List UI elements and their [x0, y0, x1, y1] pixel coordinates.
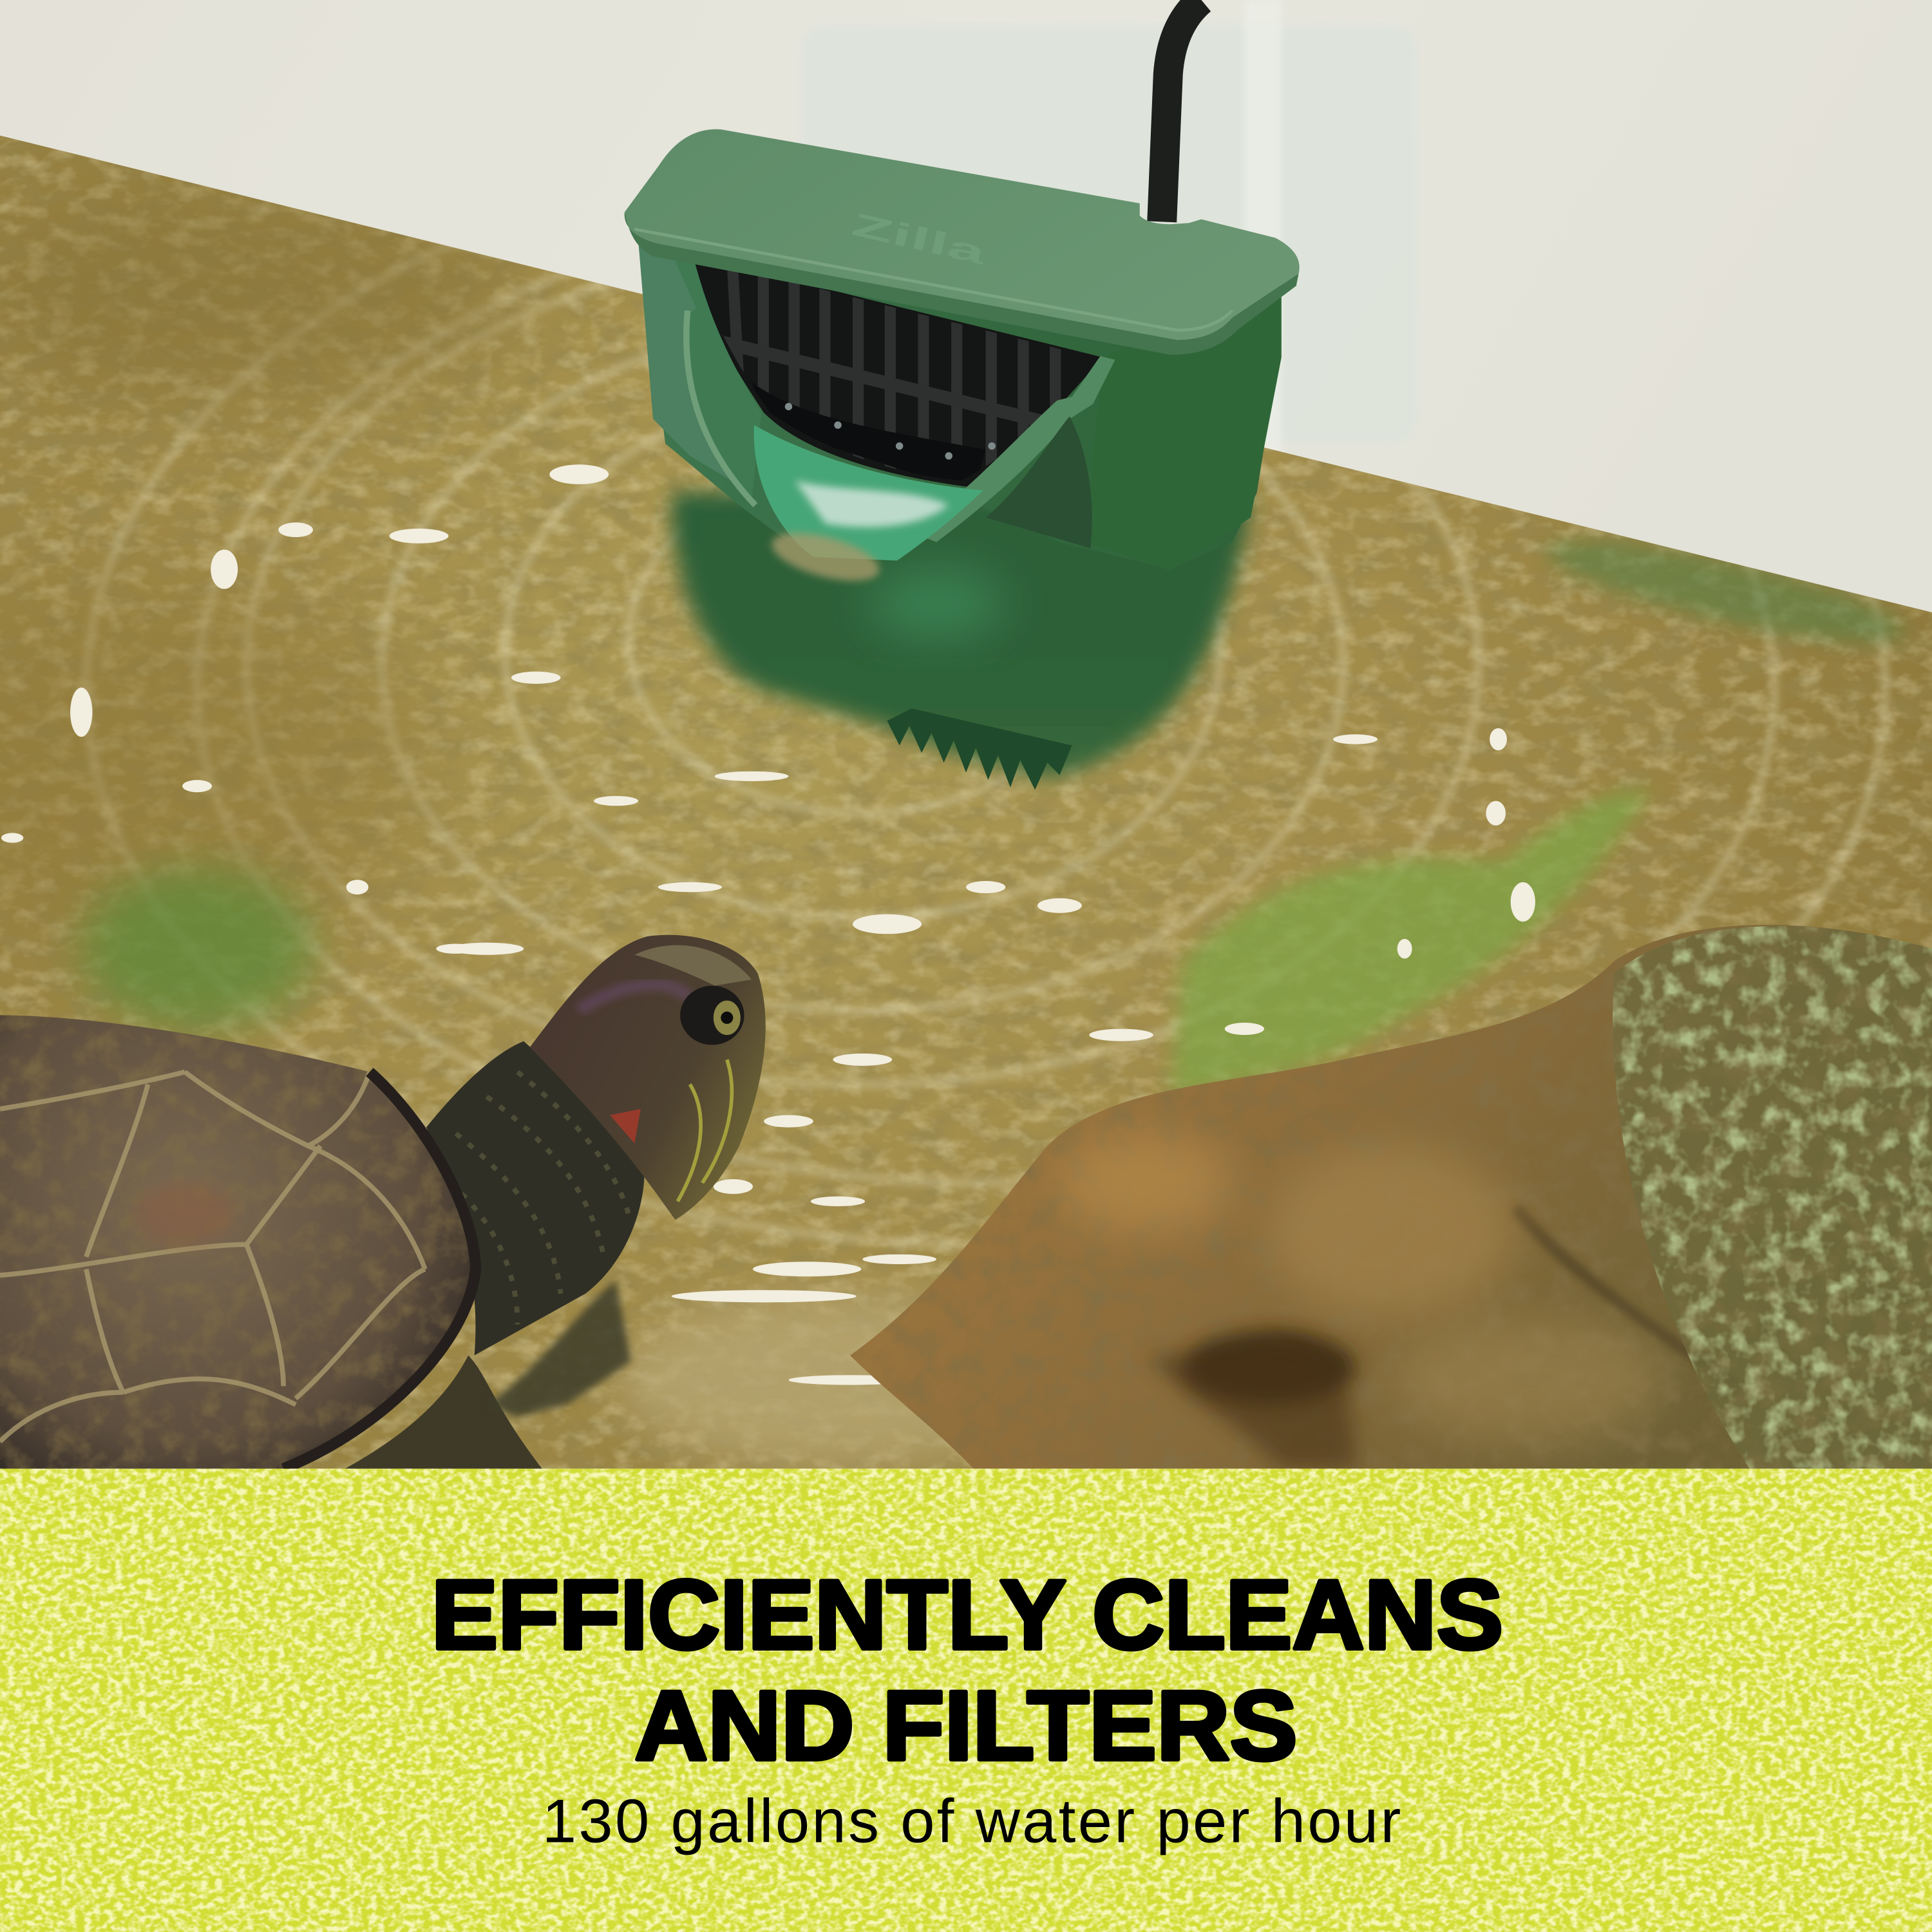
panel: caption band [0, 1469, 1932, 1932]
green algae patches [80, 869, 314, 1029]
heading: AND FILTERS [634, 1671, 1298, 1781]
submerged filter reflection [672, 493, 1251, 790]
turtle [0, 935, 766, 1472]
rear foot [345, 1356, 542, 1469]
water with pebbles [0, 123, 1932, 1479]
spillway rims [672, 252, 761, 499]
dark shade of pebbles on left [0, 567, 431, 961]
filter grid opening [680, 252, 1103, 493]
head [530, 935, 766, 1220]
eye [680, 986, 744, 1045]
heading: EFFICIENTLY CLEANS [431, 1560, 1503, 1670]
ripples [86, 135, 1885, 1244]
neck [426, 1041, 645, 1356]
spilling water [754, 425, 983, 561]
white water glints [1, 464, 1535, 1385]
lid [625, 129, 1300, 340]
heading [431, 1560, 1503, 1781]
subheading: 130 gallons of water per hour [542, 1786, 1401, 1855]
rock [838, 912, 1932, 1479]
filter box [625, 129, 1300, 591]
filter cord [1162, 0, 1201, 222]
background: wall [0, 0, 1932, 641]
embossed brand mark on lid: Zilla [849, 206, 989, 272]
shell [0, 1016, 476, 1469]
body [638, 240, 1282, 569]
moss on rock mound [1589, 912, 1932, 1479]
